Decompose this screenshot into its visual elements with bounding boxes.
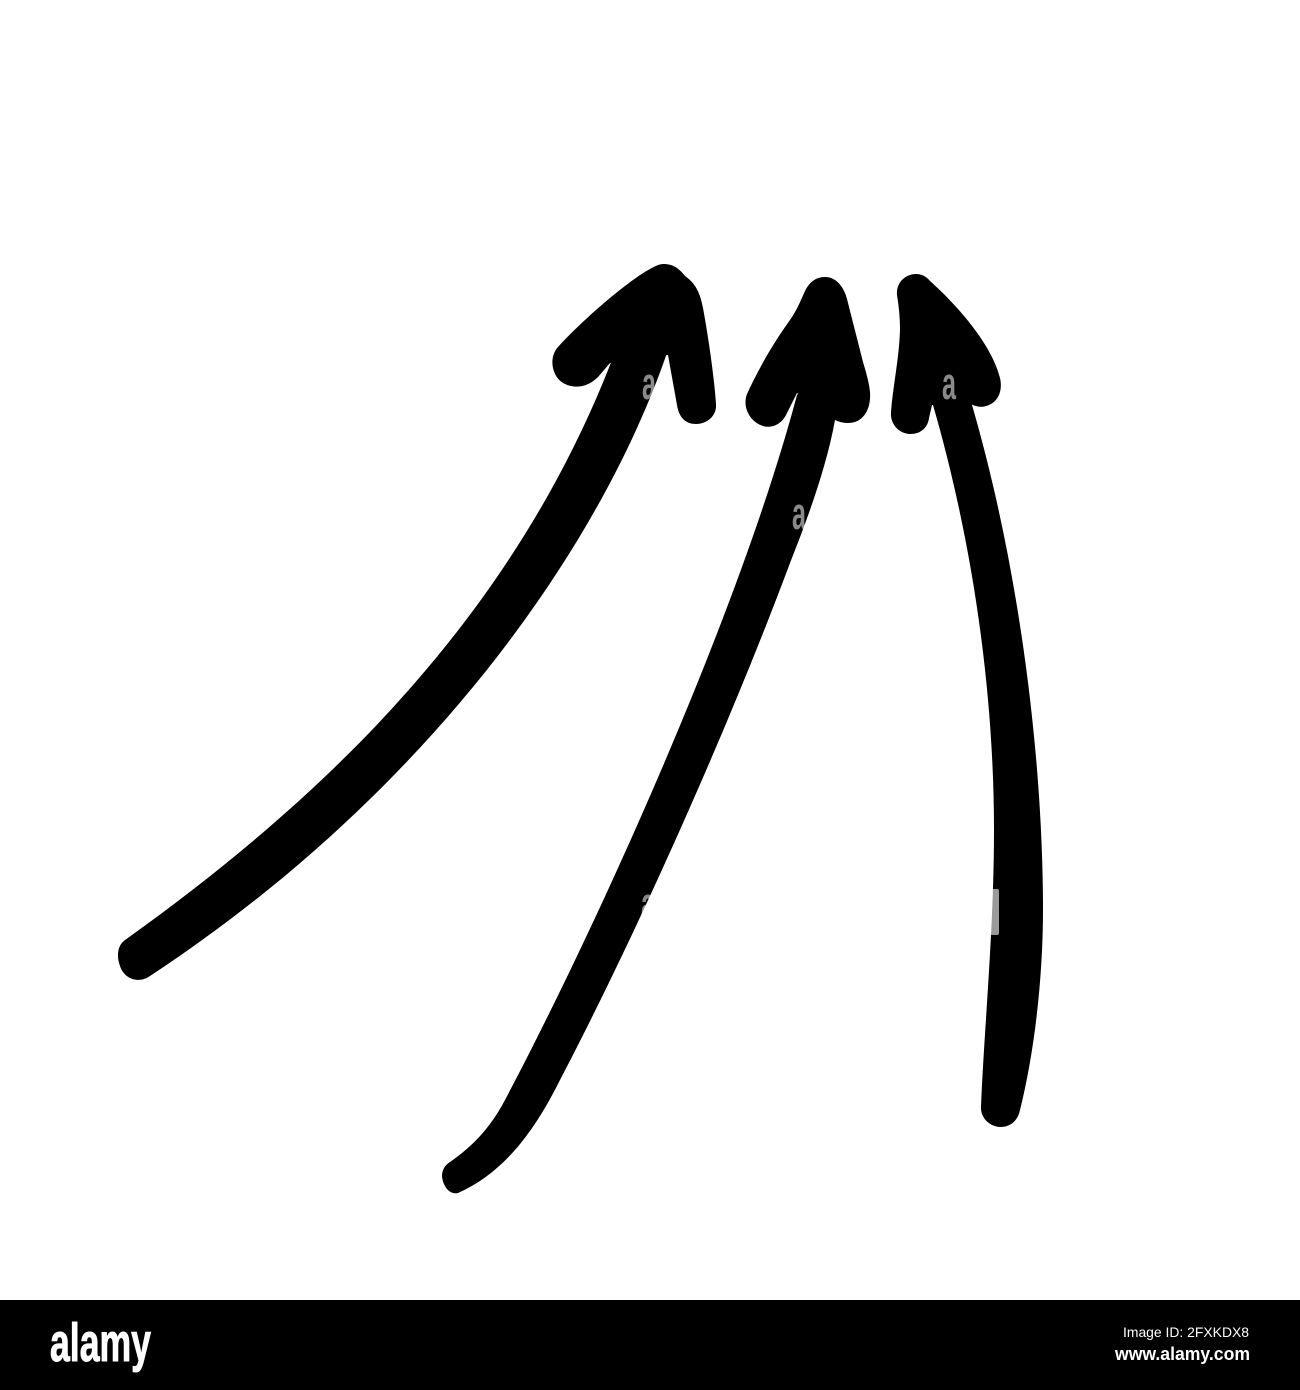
footer text: image ID: Image ID: 2FXKDX8 (1123, 1324, 1249, 1340)
footer: black attribution band (0, 1300, 1300, 1390)
watermark: small grey letters on arrows: a (641, 878, 656, 929)
arrow: left curved arrow (118, 264, 716, 980)
watermark: small grey letters on arrows: a (642, 358, 657, 409)
footer logo: alamy: alamy (50, 1313, 151, 1373)
watermark: small grey letters on arrows: a (942, 358, 957, 409)
arrow: middle long arrow (442, 277, 870, 1193)
footer text: website: www.alamy.com (1114, 1344, 1250, 1364)
watermark: small grey letters on arrows: a (792, 488, 807, 539)
watermark: small grey letters on arrows (641, 358, 999, 935)
arrow: right arrow (891, 274, 1043, 1127)
